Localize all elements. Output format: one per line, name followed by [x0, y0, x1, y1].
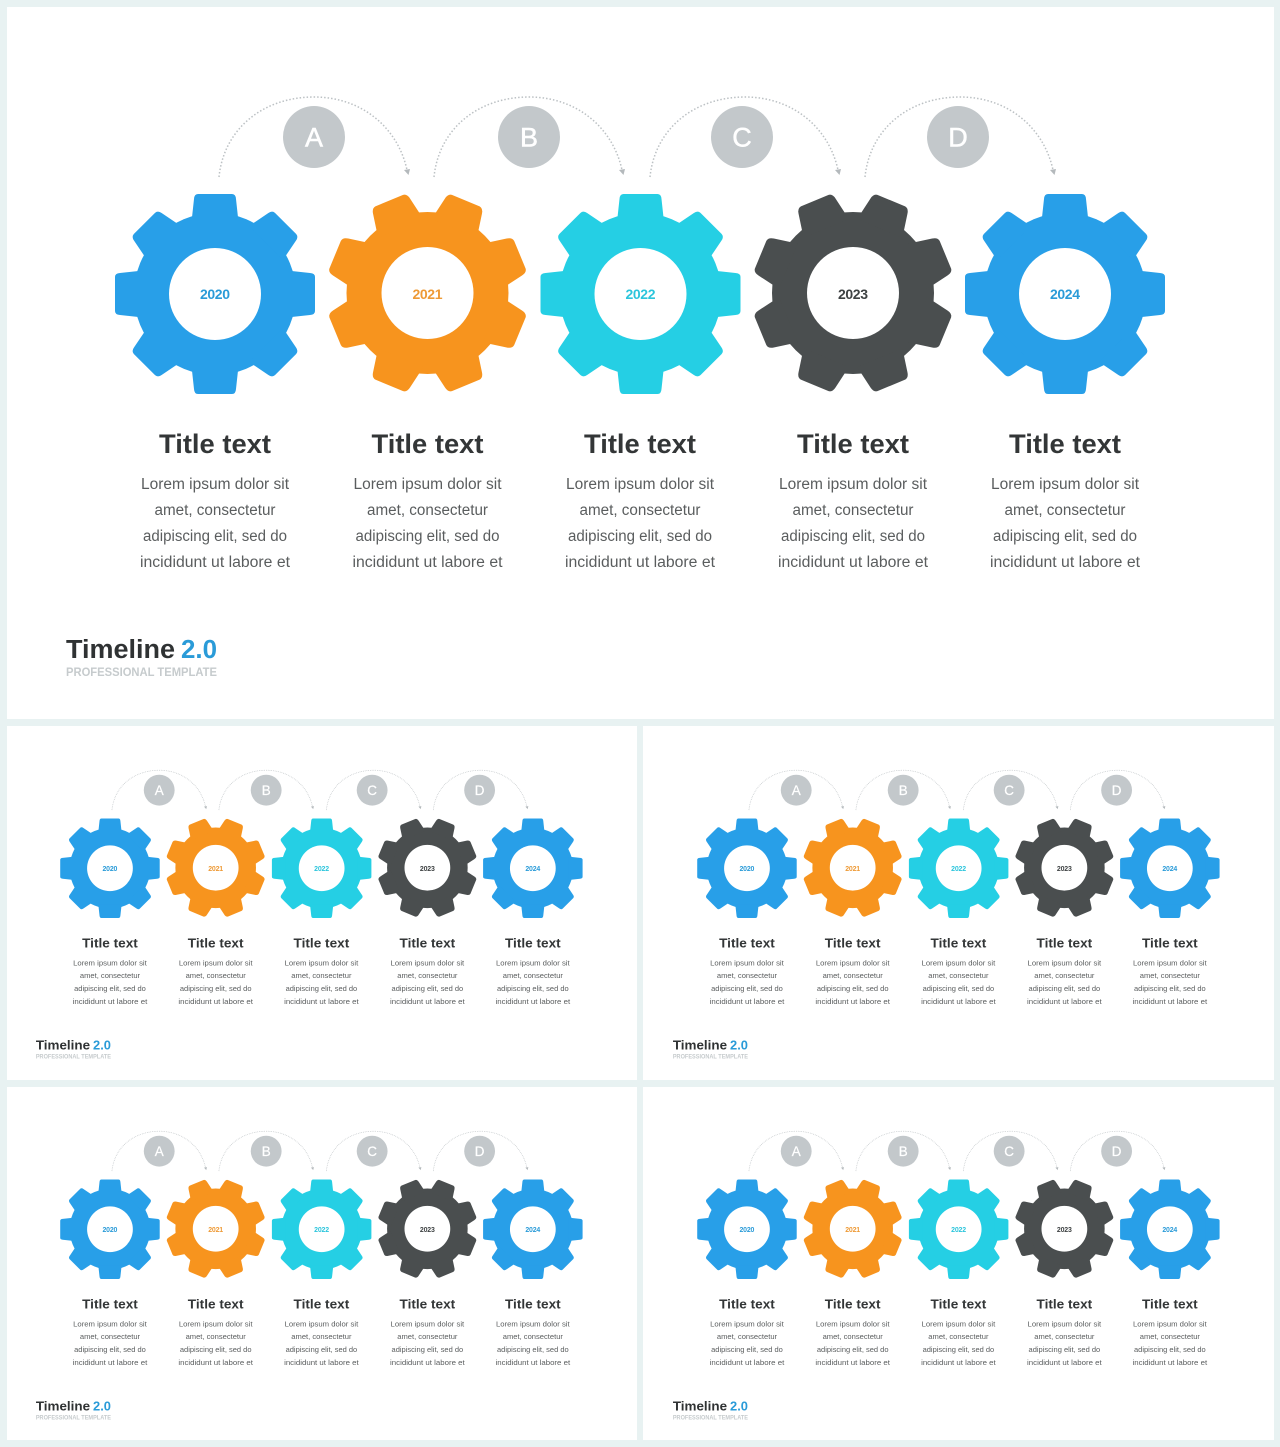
column text: adipiscing elit, sed do	[711, 984, 783, 993]
gear 2020	[115, 194, 315, 394]
column text: adipiscing elit, sed do	[923, 1345, 994, 1354]
gears 2020 to 2024: 2024	[1162, 866, 1177, 873]
column text: Lorem ipsum dolor sit	[710, 1319, 785, 1328]
column text: incididunt ut labore et	[73, 997, 148, 1006]
arc arrows	[749, 1131, 1165, 1171]
badges A to D: C	[367, 1144, 377, 1159]
column text	[73, 935, 571, 1006]
heading: Timeline 2.0: Timeline	[66, 636, 175, 664]
gears 2020 to 2024	[697, 803, 1220, 933]
badges A to D: A	[792, 1144, 801, 1159]
column text: Title text	[1142, 935, 1198, 950]
column text: Lorem ipsum dolor sit	[179, 1319, 253, 1328]
gear 2024	[965, 194, 1165, 394]
heading: Timeline 2.0: PROFESSIONAL TEMPLATE	[673, 1054, 748, 1060]
slide content	[36, 770, 583, 1060]
column text: Lorem ipsum dolor sit	[710, 958, 785, 967]
column text: adipiscing elit, sed do	[180, 1345, 252, 1354]
panel: main slide	[7, 7, 1274, 719]
heading: Timeline 2.0: 2.0	[93, 1038, 111, 1052]
column text: adipiscing elit, sed do	[286, 1345, 357, 1354]
gear 2023: 2023	[838, 286, 868, 302]
column 4 text: incididunt ut labore et	[778, 554, 929, 571]
column text: adipiscing elit, sed do	[497, 1345, 569, 1354]
badge A: A	[305, 122, 323, 152]
column 1 text	[140, 429, 291, 571]
column text: Lorem ipsum dolor sit	[496, 1319, 571, 1328]
gears 2020 to 2024: 2020	[103, 1227, 118, 1234]
column text: amet, consectetur	[1034, 971, 1095, 980]
column text: adipiscing elit, sed do	[497, 984, 569, 993]
column text: Lorem ipsum dolor sit	[816, 958, 890, 967]
panel: small slide top left	[7, 726, 637, 1080]
column text: amet, consectetur	[717, 1332, 777, 1341]
heading: Timeline 2.0: PROFESSIONAL TEMPLATE	[673, 1415, 748, 1421]
heading: Timeline 2.0	[673, 1038, 748, 1060]
column text: adipiscing elit, sed do	[817, 984, 889, 993]
column 3 text: adipiscing elit, sed do	[568, 528, 712, 545]
column 2 text: adipiscing elit, sed do	[356, 528, 500, 545]
arc arrows	[112, 1131, 528, 1171]
column text: adipiscing elit, sed do	[1029, 984, 1100, 993]
gears 2020 to 2024: 2022	[314, 1227, 329, 1234]
column text	[73, 1296, 571, 1367]
badges A to D: A	[792, 783, 801, 798]
badges A to D: D	[1112, 1144, 1122, 1159]
column text: adipiscing elit, sed do	[392, 984, 463, 993]
gears 2020 to 2024: 2021	[845, 866, 860, 873]
column 5 text: Title text	[1009, 429, 1121, 459]
arc arrows	[749, 770, 1165, 810]
arc arrows	[112, 770, 528, 810]
column text: incididunt ut labore et	[1133, 1358, 1208, 1367]
column text: amet, consectetur	[928, 1332, 989, 1341]
column 1 text: Title text	[159, 429, 271, 459]
badges A to D	[144, 775, 495, 806]
arc arrow D to E	[865, 97, 1056, 177]
slide content	[36, 1131, 583, 1421]
badges A to D: D	[475, 1144, 485, 1159]
badges A to D: B	[262, 1144, 271, 1159]
column text: adipiscing elit, sed do	[711, 1345, 783, 1354]
gear 2021: 2021	[412, 286, 443, 302]
badges A to D: B	[899, 1144, 908, 1159]
column text: adipiscing elit, sed do	[180, 984, 252, 993]
column text: adipiscing elit, sed do	[817, 1345, 889, 1354]
column text: incididunt ut labore et	[390, 997, 466, 1006]
badge B: B	[520, 122, 538, 152]
column text: adipiscing elit, sed do	[1134, 984, 1206, 993]
gears 2020 to 2024: 2024	[1162, 1227, 1177, 1234]
column text: Title text	[294, 935, 350, 950]
arc arrow C to D	[650, 97, 841, 177]
column text: adipiscing elit, sed do	[74, 1345, 146, 1354]
column 2 text: Title text	[372, 429, 484, 459]
heading: Timeline 2.0	[36, 1038, 111, 1060]
badges A to D: B	[262, 783, 271, 798]
gear 2022: 2022	[626, 286, 656, 302]
column text: Title text	[719, 1296, 775, 1311]
column text: amet, consectetur	[928, 971, 989, 980]
column text: Lorem ipsum dolor sit	[1133, 958, 1208, 967]
column 4 text: Title text	[797, 429, 909, 459]
column 4 text: amet, consectetur	[792, 502, 914, 519]
badge A	[283, 106, 345, 168]
column text: incididunt ut labore et	[815, 997, 891, 1006]
column 1 text: incididunt ut labore et	[140, 554, 291, 571]
slide content	[673, 1131, 1220, 1421]
slide content	[673, 770, 1220, 1060]
column text: amet, consectetur	[186, 1332, 246, 1341]
panel: small slide top right	[643, 726, 1274, 1080]
gear 2020: 2020	[200, 286, 230, 302]
badges A to D: A	[155, 783, 164, 798]
column text: incididunt ut labore et	[178, 997, 254, 1006]
column 1 text: adipiscing elit, sed do	[143, 528, 287, 545]
column text: incididunt ut labore et	[921, 997, 997, 1006]
gears 2020 to 2024: 2021	[845, 1227, 860, 1234]
column text	[710, 1296, 1208, 1367]
column text: incididunt ut labore et	[390, 1358, 466, 1367]
column 1 text: Lorem ipsum dolor sit	[141, 476, 290, 493]
column text: Title text	[82, 1296, 138, 1311]
gears 2020 to 2024: 2020	[103, 866, 118, 873]
column text: Title text	[1037, 935, 1093, 950]
column 2 text: Lorem ipsum dolor sit	[354, 476, 502, 493]
column text: adipiscing elit, sed do	[286, 984, 357, 993]
column text: incididunt ut labore et	[1027, 997, 1103, 1006]
column 1 text: amet, consectetur	[154, 502, 276, 519]
badges A to D: C	[1004, 1144, 1014, 1159]
column text: amet, consectetur	[823, 971, 883, 980]
column text: incididunt ut labore et	[921, 1358, 997, 1367]
column text: Title text	[825, 1296, 881, 1311]
heading: Timeline 2.0	[66, 636, 217, 679]
column 3 text: Title text	[584, 429, 696, 459]
column text: Title text	[400, 935, 456, 950]
column text: amet, consectetur	[80, 1332, 140, 1341]
column text: Lorem ipsum dolor sit	[922, 1319, 996, 1328]
panel: small slide bottom right	[643, 1087, 1274, 1440]
column text: Lorem ipsum dolor sit	[391, 958, 465, 967]
heading: Timeline 2.0	[673, 1399, 748, 1421]
column text: incididunt ut labore et	[1027, 1358, 1103, 1367]
badges A to D: C	[367, 783, 377, 798]
column 2 text: incididunt ut labore et	[352, 554, 503, 571]
column text: Lorem ipsum dolor sit	[179, 958, 253, 967]
badges A to D: D	[475, 783, 485, 798]
heading: Timeline 2.0: Timeline	[36, 1399, 90, 1413]
column text: adipiscing elit, sed do	[392, 1345, 463, 1354]
heading: Timeline 2.0: PROFESSIONAL TEMPLATE	[36, 1054, 111, 1060]
panel: small slide bottom left	[7, 1087, 637, 1440]
column text: Lorem ipsum dolor sit	[816, 1319, 890, 1328]
column text: Title text	[931, 1296, 987, 1311]
gears 2020 to 2024: 2022	[314, 866, 329, 873]
column text: Title text	[931, 935, 987, 950]
column 4 text: Lorem ipsum dolor sit	[779, 476, 928, 493]
column text: Lorem ipsum dolor sit	[285, 958, 359, 967]
heading: Timeline 2.0: 2.0	[730, 1038, 748, 1052]
column text: amet, consectetur	[1034, 1332, 1095, 1341]
gears 2020 to 2024: 2020	[740, 866, 755, 873]
column text: amet, consectetur	[823, 1332, 883, 1341]
column 2 text: amet, consectetur	[367, 502, 488, 519]
column 2 text	[352, 429, 503, 571]
badge B	[498, 106, 560, 168]
arc arrow A to B	[219, 97, 410, 177]
badges A to D: D	[1112, 783, 1122, 798]
gears 2020 to 2024: 2021	[208, 1227, 223, 1234]
column text	[710, 935, 1208, 1006]
column text: Lorem ipsum dolor sit	[922, 958, 996, 967]
badge D	[927, 106, 989, 168]
column 3 text: incididunt ut labore et	[565, 554, 716, 571]
column text: amet, consectetur	[291, 1332, 352, 1341]
column text: amet, consectetur	[503, 971, 563, 980]
badges A to D	[781, 775, 1132, 806]
column text: Title text	[82, 935, 138, 950]
column 4 text	[778, 429, 929, 571]
column text: amet, consectetur	[1140, 1332, 1200, 1341]
gears 2020 to 2024: 2024	[525, 866, 540, 873]
column text: Title text	[1037, 1296, 1093, 1311]
column text: Lorem ipsum dolor sit	[285, 1319, 359, 1328]
column text: amet, consectetur	[503, 1332, 563, 1341]
column text: incididunt ut labore et	[178, 1358, 254, 1367]
column 5 text	[990, 429, 1141, 571]
badges A to D: B	[899, 783, 908, 798]
column 5 text: incididunt ut labore et	[990, 554, 1141, 571]
column 3 text	[565, 429, 716, 571]
column text: Title text	[825, 935, 881, 950]
column text: Title text	[188, 1296, 244, 1311]
column 4 text: adipiscing elit, sed do	[781, 528, 925, 545]
gears 2020 to 2024: 2024	[525, 1227, 540, 1234]
column text: amet, consectetur	[397, 971, 458, 980]
column 5 text: adipiscing elit, sed do	[993, 528, 1137, 545]
heading: Timeline 2.0: Timeline	[673, 1038, 727, 1052]
gears 2020 to 2024	[60, 803, 583, 933]
gears 2020 to 2024: 2022	[951, 1227, 966, 1234]
heading: Timeline 2.0: PROFESSIONAL TEMPLATE	[36, 1415, 111, 1421]
gears 2020 to 2024: 2023	[1057, 1227, 1072, 1234]
column text: amet, consectetur	[397, 1332, 458, 1341]
gears 2020 to 2024: 2021	[208, 866, 223, 873]
column text: amet, consectetur	[80, 971, 140, 980]
heading: Timeline 2.0: Timeline	[36, 1038, 90, 1052]
column text: Title text	[188, 935, 244, 950]
badges A to D: C	[1004, 783, 1014, 798]
gear 2022	[540, 194, 740, 394]
heading: Timeline 2.0	[36, 1399, 111, 1421]
badges A to D: A	[155, 1144, 164, 1159]
column text: adipiscing elit, sed do	[1029, 1345, 1100, 1354]
column text: adipiscing elit, sed do	[74, 984, 146, 993]
gears 2020 to 2024: 2023	[1057, 866, 1072, 873]
column text: Title text	[719, 935, 775, 950]
column text: incididunt ut labore et	[284, 997, 360, 1006]
arc arrow B to C	[434, 97, 625, 177]
column 3 text: Lorem ipsum dolor sit	[566, 476, 715, 493]
column text: incididunt ut labore et	[73, 1358, 148, 1367]
column text: Lorem ipsum dolor sit	[1028, 958, 1102, 967]
heading: Timeline 2.0: PROFESSIONAL TEMPLATE	[66, 665, 217, 679]
badge C	[711, 106, 773, 168]
heading: Timeline 2.0: Timeline	[673, 1399, 727, 1413]
badge C: C	[732, 122, 752, 152]
column text: Lorem ipsum dolor sit	[73, 958, 148, 967]
column text: Title text	[294, 1296, 350, 1311]
column text: Lorem ipsum dolor sit	[1028, 1319, 1102, 1328]
heading: Timeline 2.0: 2.0	[730, 1399, 748, 1413]
column text: incididunt ut labore et	[710, 1358, 785, 1367]
column text: Title text	[505, 935, 561, 950]
column text: incididunt ut labore et	[1133, 997, 1208, 1006]
column text: incididunt ut labore et	[710, 997, 785, 1006]
heading: Timeline 2.0: 2.0	[181, 636, 217, 664]
column text: incididunt ut labore et	[815, 1358, 891, 1367]
gears 2020 to 2024	[60, 1164, 583, 1294]
gear 2021	[297, 162, 558, 424]
column text: adipiscing elit, sed do	[923, 984, 994, 993]
gear 2024: 2024	[1050, 286, 1080, 302]
column text: adipiscing elit, sed do	[1134, 1345, 1206, 1354]
gears 2020 to 2024: 2023	[420, 866, 435, 873]
gears 2020 to 2024	[697, 1164, 1220, 1294]
column 5 text: amet, consectetur	[1004, 502, 1126, 519]
column text: incididunt ut labore et	[496, 997, 571, 1006]
gears 2020 to 2024: 2023	[420, 1227, 435, 1234]
column text: Lorem ipsum dolor sit	[391, 1319, 465, 1328]
column text: Lorem ipsum dolor sit	[1133, 1319, 1208, 1328]
column text: amet, consectetur	[1140, 971, 1200, 980]
column text: Title text	[1142, 1296, 1198, 1311]
badges A to D	[781, 1136, 1132, 1167]
gears 2020 to 2024: 2022	[951, 866, 966, 873]
column text: incididunt ut labore et	[496, 1358, 571, 1367]
badge D: D	[948, 122, 968, 152]
column 3 text: amet, consectetur	[580, 502, 700, 519]
column text: incididunt ut labore et	[284, 1358, 360, 1367]
column text: Lorem ipsum dolor sit	[496, 958, 571, 967]
gears 2020 to 2024: 2020	[740, 1227, 755, 1234]
column text: amet, consectetur	[186, 971, 246, 980]
column text: amet, consectetur	[717, 971, 777, 980]
heading: Timeline 2.0: 2.0	[93, 1399, 111, 1413]
column 5 text: Lorem ipsum dolor sit	[991, 476, 1140, 493]
column text: Title text	[505, 1296, 561, 1311]
gear 2023	[722, 162, 984, 424]
badges A to D	[144, 1136, 495, 1167]
column text: Lorem ipsum dolor sit	[73, 1319, 148, 1328]
column text: Title text	[400, 1296, 456, 1311]
column text: amet, consectetur	[291, 971, 352, 980]
